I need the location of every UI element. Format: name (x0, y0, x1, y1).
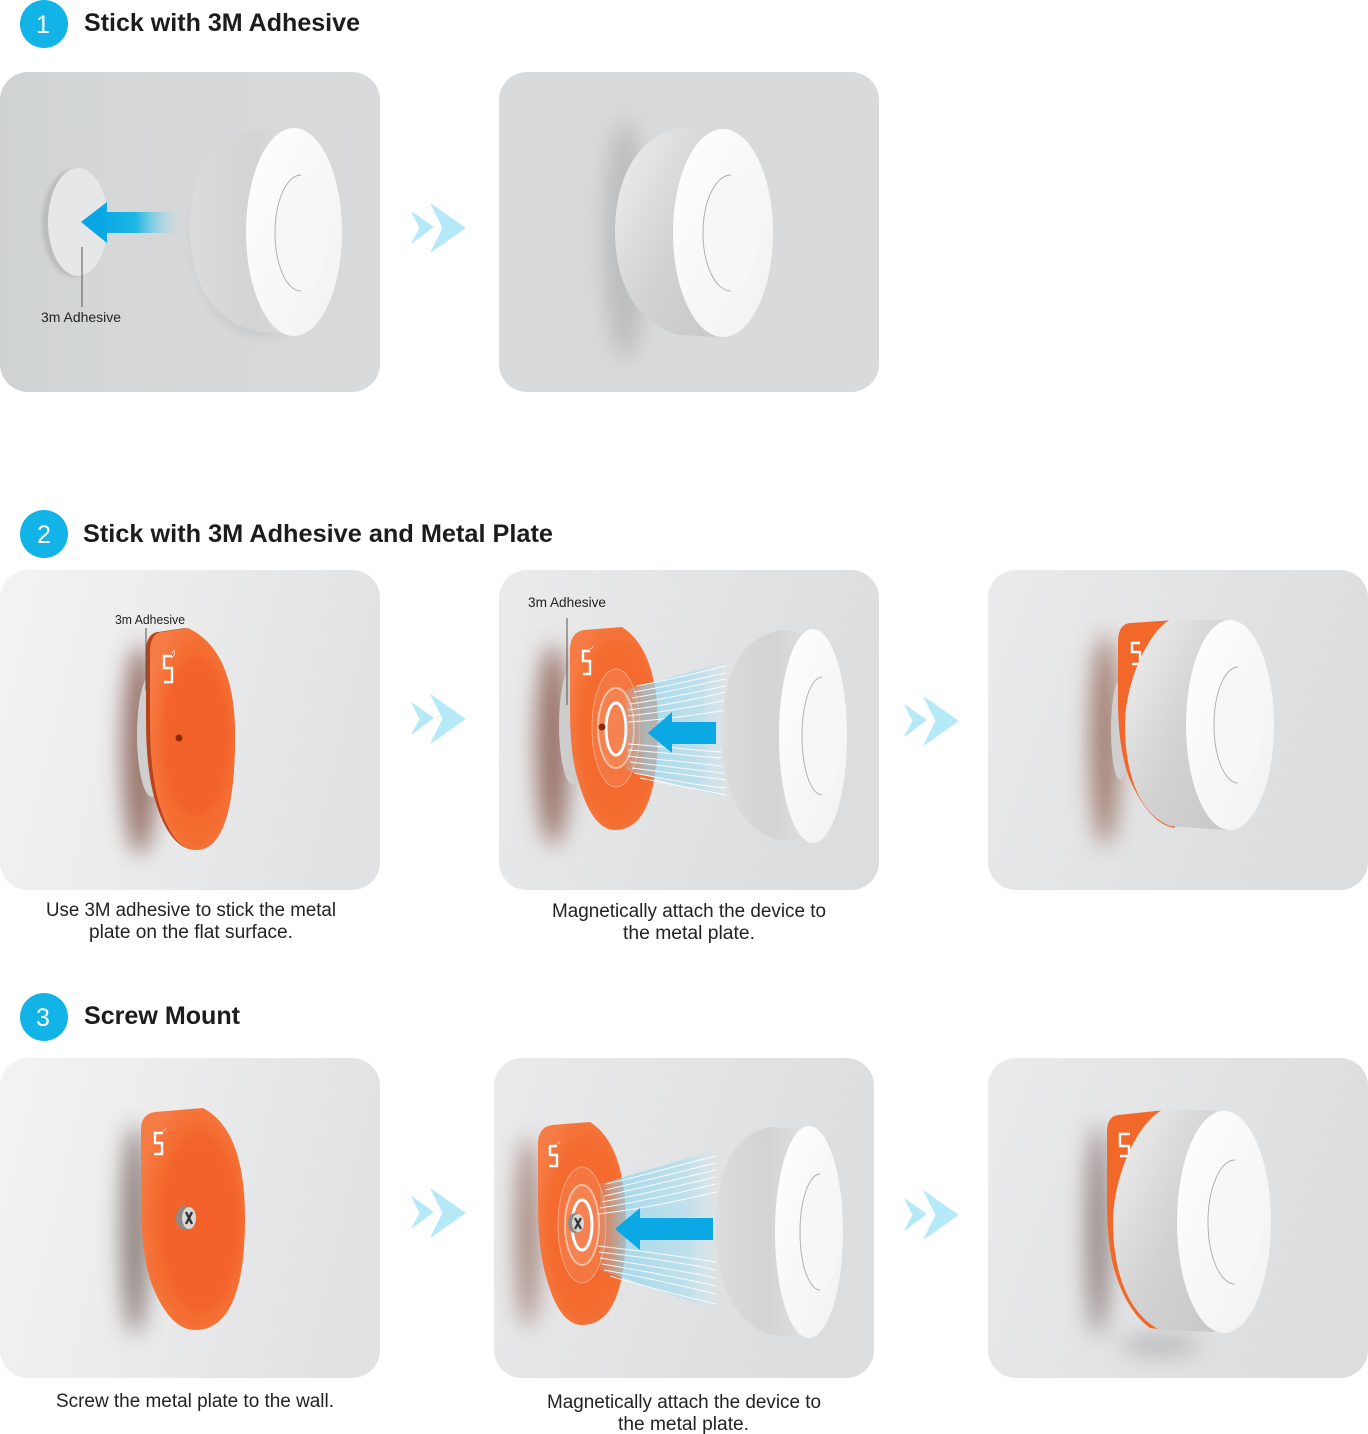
arrow (615, 1208, 713, 1250)
caption: Magnetically attach the device to (547, 1392, 821, 1413)
device (1125, 620, 1274, 830)
caption (552, 901, 826, 944)
magnetic field lines (625, 662, 726, 798)
arrow chevrons (412, 204, 465, 252)
arrow (648, 712, 716, 753)
device (208, 128, 342, 337)
step 2 number badge (20, 510, 68, 558)
panel: attach device to screwed plate (494, 1058, 874, 1378)
magnetic rings (592, 669, 640, 787)
caption: Use 3M adhesive to stick the metal (46, 900, 336, 921)
leader line (82, 247, 83, 307)
step 1 number badge (20, 0, 68, 48)
caption (547, 1392, 821, 1434)
metal plate (1107, 1110, 1165, 1330)
step 1 heading: Stick with 3M Adhesive (84, 9, 360, 37)
panel: plate with adhesive (0, 570, 380, 890)
panel: device on wall (499, 72, 879, 392)
caption (46, 900, 336, 943)
panel: adhesive and device apart (0, 72, 380, 392)
magnetic field lines (598, 1150, 716, 1310)
adhesive disc (42, 168, 108, 277)
adhesive behind plate (137, 680, 154, 797)
panel: screw plate to wall (0, 1058, 380, 1378)
metal plate (538, 1122, 626, 1325)
panel: device attached to plate (988, 570, 1368, 890)
magnetic rings (558, 1167, 606, 1283)
leader line (566, 618, 568, 705)
metal plate (1118, 620, 1175, 828)
adhesive behind plate (559, 668, 578, 785)
device (1113, 1110, 1271, 1333)
arrow chevrons (905, 1191, 958, 1239)
device (615, 128, 773, 337)
step 1 number badge: 1 (36, 11, 50, 39)
metal plate (141, 1108, 245, 1330)
label: 3m Adhesive: 3m Adhesive (115, 613, 185, 627)
arrow chevrons (412, 695, 465, 743)
panel: device on screwed plate (988, 1058, 1368, 1378)
metal plate (146, 628, 235, 850)
arrow chevrons (412, 1189, 465, 1237)
arrow chevrons (905, 697, 958, 745)
device (722, 629, 847, 843)
step 2 number badge: 2 (37, 521, 51, 549)
screw (568, 1213, 584, 1233)
screw (176, 1206, 196, 1230)
metal plate (570, 627, 658, 830)
step 3 number badge: 3 (36, 1004, 50, 1032)
step 2 heading: Stick with 3M Adhesive and Metal Plate (83, 520, 553, 548)
label: 3m Adhesive: 3m Adhesive (41, 309, 121, 325)
arrow: push onto adhesive (81, 202, 180, 243)
caption: the metal plate. (623, 923, 755, 944)
caption: plate on the flat surface. (89, 922, 293, 943)
label: 3m Adhesive: 3m Adhesive (528, 594, 606, 610)
device (716, 1126, 843, 1338)
step 3 number badge (20, 993, 68, 1041)
step 3 heading: Screw Mount (84, 1002, 241, 1030)
caption: Magnetically attach the device to (552, 901, 826, 922)
caption: Screw the metal plate to the wall. (56, 1391, 334, 1412)
leader line (146, 628, 147, 690)
panel: attach device to plate (499, 570, 879, 890)
